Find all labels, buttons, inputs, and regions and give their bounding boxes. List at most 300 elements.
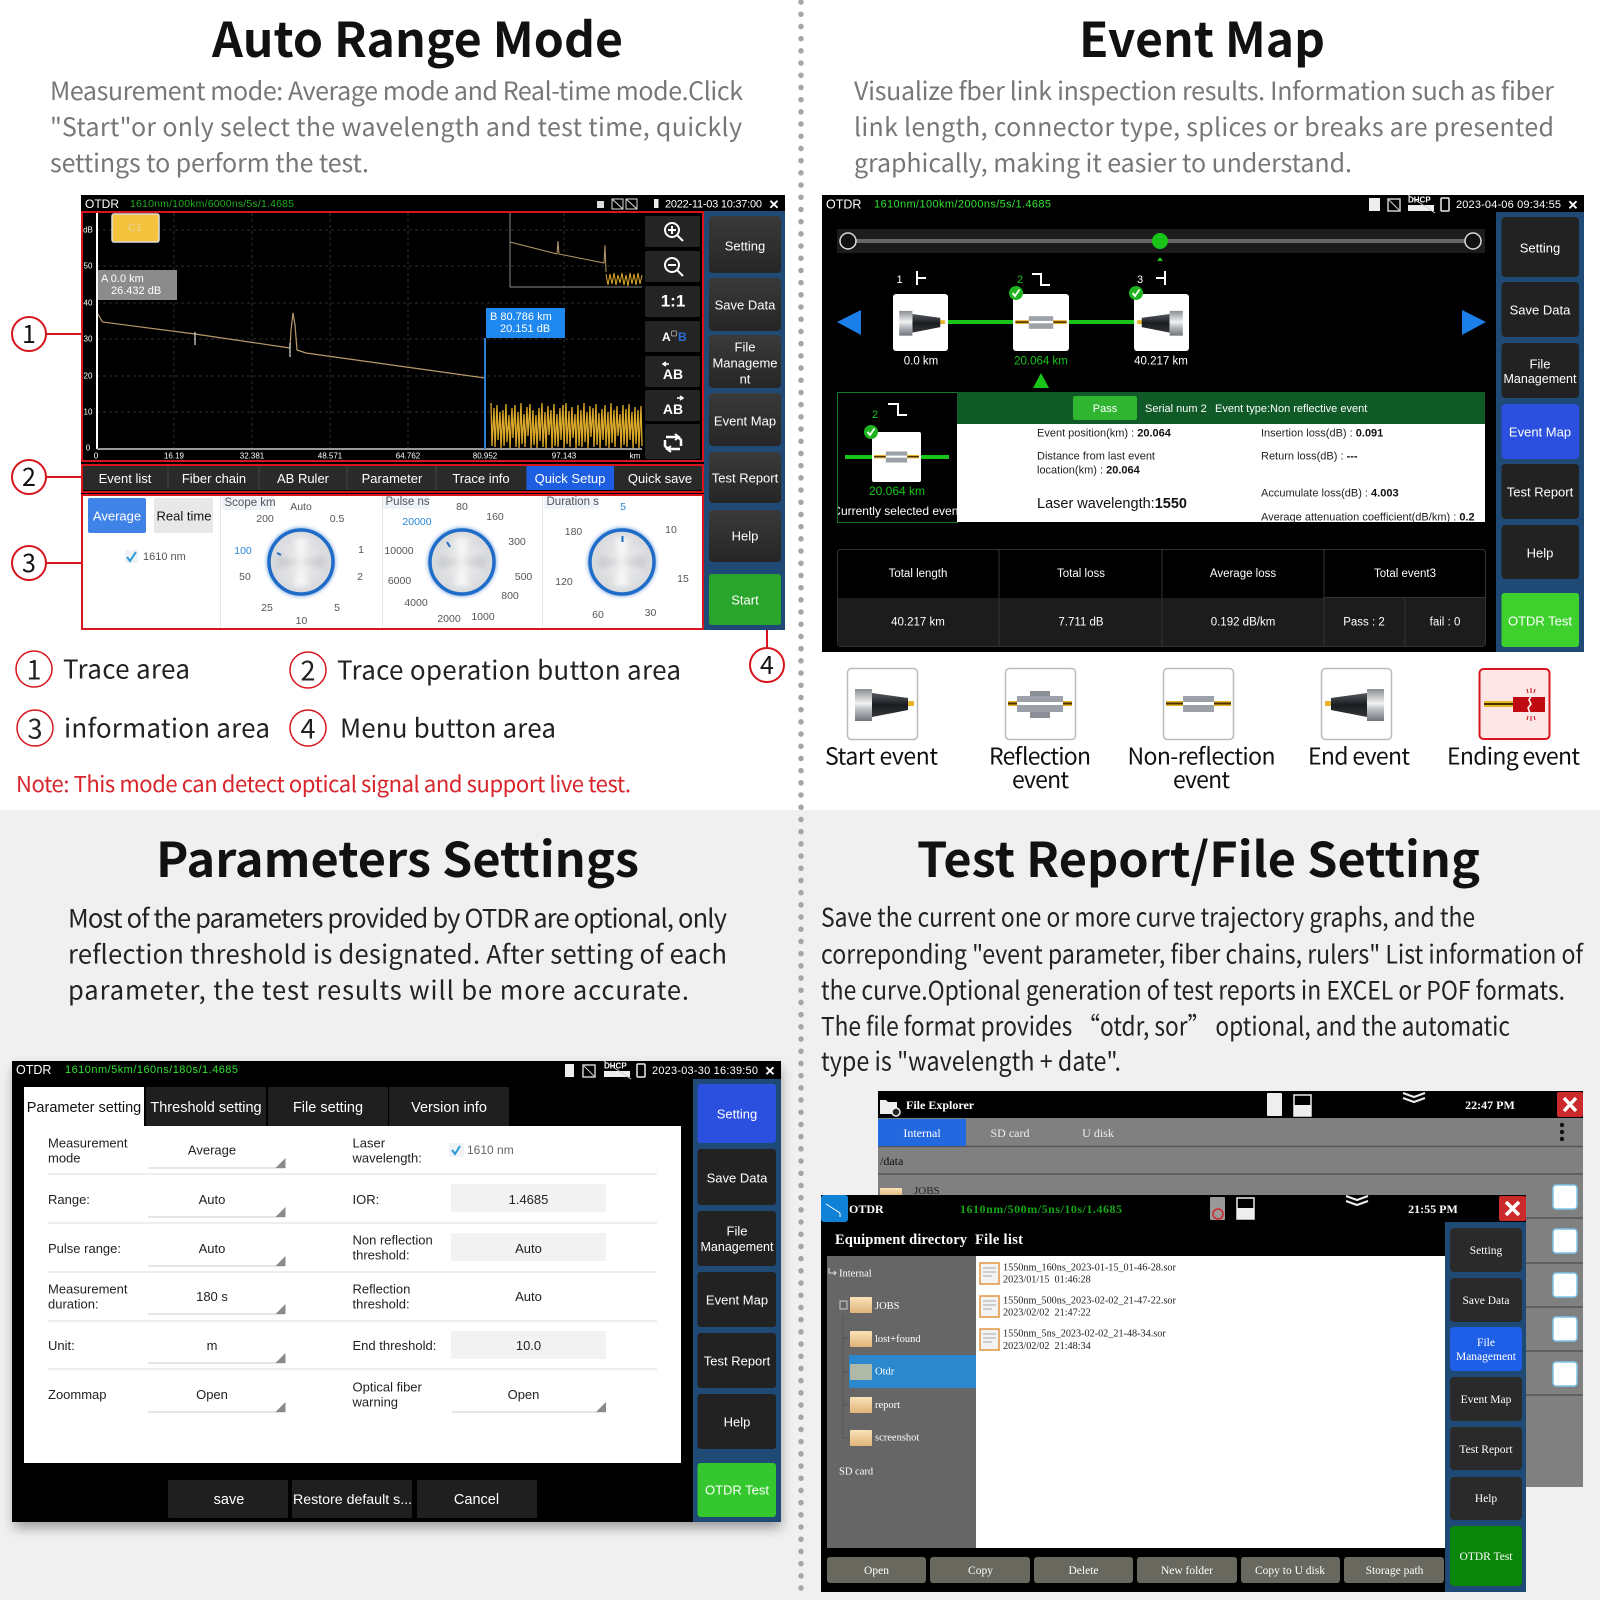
button: Save Data [1450,1278,1522,1322]
button: Event Map: Event Map [1461,1394,1512,1406]
button: File Management [1502,343,1579,398]
button: Help [1502,525,1579,579]
marker A label [98,270,177,300]
status bar: ✕ [765,1064,775,1078]
folder report [850,1397,900,1413]
left column labels [48,1136,128,1402]
trace area: km [630,452,641,460]
text: event map description: link length, connector type, splices or breaks are presented [854,108,1554,144]
storage tabs: Internal [903,1126,941,1140]
summary table: fail : 0 [1430,616,1460,628]
left column values: 180 s [196,1289,228,1304]
legend item 3: information area [64,708,270,746]
right column values: 10.0 [516,1338,541,1353]
button: Event Map active [1502,404,1579,459]
right column labels: Reflection [352,1282,410,1296]
legend item 2: 2 [300,650,316,688]
button: File Management: nt [740,372,751,386]
status bar: 1610nm/100km/2000ns/5s/1.4685 [874,198,1051,210]
pass badge: Pass [1093,403,1118,415]
button: C1 [112,214,159,242]
dial: Pulse ns: 20000 [402,516,432,528]
text: event map description: Visualize fber link inspection results. Information such as fiber [854,72,1554,108]
menu panel [693,1079,781,1522]
legend item 3: 3 [28,708,42,746]
right column labels: IOR: [352,1192,379,1207]
pass badge [1073,396,1137,420]
right column values: Auto [515,1289,542,1304]
menu panel [1496,212,1584,652]
button: Setting: Setting [1470,1245,1503,1257]
right column values: 1.4685 [509,1192,548,1207]
status bar: ✕ [1568,198,1578,212]
summary table: 7.711 dB [1058,616,1104,628]
file 2: 1550nm_500ns_2023-02-02_21-47-22.sor [1003,1296,1177,1306]
trace area: 16.19 [164,452,185,460]
left column values: Auto [199,1241,225,1256]
button: File Management: Management [701,1240,774,1254]
button: OTDR Test: OTDR Test [1460,1551,1513,1563]
dial: Pulse ns: 800 [501,590,519,602]
panel: parameters settings heading [68,821,727,1008]
marker B label [485,308,565,449]
text: parameters description: parameter, the test results will be more accurate. [68,970,689,1008]
status bar: OTDR [85,197,119,211]
button: Storage path: Storage path [1366,1565,1424,1577]
button: Event Map [1450,1377,1522,1421]
left column labels: mode [48,1150,81,1166]
text: event map description [854,72,1554,180]
folder screenshot: screenshot [875,1432,919,1444]
trace operation tabs: Fiber chain [182,471,246,486]
folder JOBS [840,1297,900,1313]
text: parameters description: reflection threshold is designated. After setting of each [68,934,727,972]
button: Test Report [698,1333,776,1388]
left column labels: Range: [48,1192,90,1207]
marker B label: 20.151 dB [500,323,550,335]
menu panel [1445,1222,1526,1592]
file 3: 1550nm_5ns_2023-02-02_21-48-34.sor [1003,1328,1166,1340]
dial: Scope km: 0.5 [330,513,344,525]
dial: Scope km: 25 [261,602,273,614]
header [821,1195,1526,1222]
right column labels [352,1136,436,1410]
summary table [838,550,1486,646]
right column values: Auto [515,1241,542,1256]
detail text: Average attenuation coefficient(dB/km) : 0.2 [1261,512,1475,524]
tabs [24,1087,509,1127]
dial: Scope km: Auto [290,501,312,513]
button: Test Report: Test Report [1459,1444,1513,1456]
button: save [168,1480,288,1518]
selected event detail [832,392,1485,524]
right column labels: warning [352,1394,398,1410]
button: File Management: Management [1504,372,1577,386]
button: save: save [214,1492,244,1508]
button: File Management [698,1211,776,1266]
button: File Management [709,335,781,388]
legend: area key [16,648,681,746]
status bar: 2023-04-06 09:34:55 [1456,199,1561,211]
status bar: 2023-03-30 16:39:50 [652,1065,758,1077]
panel: event map heading [854,1,1554,180]
left column values: Open [196,1387,228,1402]
screenshot: file explorer back window [878,1091,1583,1487]
right column labels: Optical fiber [352,1380,423,1394]
selected event thumbnail [832,404,962,518]
screenshot: parameter settings screen [12,1061,781,1528]
detail text: Distance from last event [1037,450,1155,462]
information area [81,494,704,630]
left column values: Average [188,1142,236,1158]
text: auto range description: "Start"or only select the wavelength and test time, quickly [50,108,742,144]
button: Storage path [1344,1557,1444,1583]
trace area: 30 [84,334,93,344]
button: Setting active [698,1084,776,1143]
title: Test Report/File Setting: Test Report/File Setting [917,821,1480,891]
panel: test report heading [821,821,1585,1078]
button: Real time [154,498,213,533]
right column labels: Non reflection [352,1232,433,1248]
callout marker 1 [12,315,81,351]
button: Open [827,1557,926,1583]
button: Start: Start [731,592,759,608]
headings: equipment directory and file list: File list [975,1232,1023,1248]
callout marker 3 [12,544,81,580]
right column labels: Laser [352,1136,386,1150]
status bar: OTDR [826,198,861,212]
trace operation tabs [83,466,703,490]
inset overview [510,213,642,287]
header: 1610nm/500m/5ns/10s/1.4685 [960,1202,1122,1216]
button: Save Data [709,278,781,331]
trace area: 50 [84,262,93,270]
file 1: 2023/01/15 01:46:28 [1003,1274,1091,1286]
file 3 [980,1328,1166,1352]
folder lost+found [850,1331,921,1347]
summary table: Total length [889,568,947,580]
dial: Duration s: 10 [665,524,677,536]
screenshot: file management front window [821,1195,1526,1592]
button: C1: C1 [128,222,142,234]
dial: Duration s [544,495,689,621]
summary table: 0.192 dB/km [1211,616,1275,628]
selected event detail: Serial num 2 [1145,403,1207,415]
legend item 1 [16,648,190,688]
button: Save Data: Save Data [707,1170,768,1186]
trace area: 40 [84,298,93,308]
event type legend [825,668,1580,795]
status bar: DHCP [1408,196,1431,204]
button: Help [698,1394,776,1449]
trace operation tabs: Trace info [452,471,510,486]
dial: Scope km: 2 [357,571,363,583]
event 3 end: 40.217 km [1134,356,1188,368]
button: Delete [1034,1557,1133,1583]
left column labels: duration: [48,1296,99,1312]
tabs: Version info [411,1100,487,1116]
icon: non-reflection event [1164,668,1234,740]
dial: Pulse ns: 500 [515,571,532,583]
screenshot: OTDR auto range screen [81,195,785,630]
callout marker 2: 2 [22,458,36,494]
summary table: 40.217 km [891,616,945,628]
legend item 4: 4 [300,708,316,746]
button: OTDR Test [1502,593,1579,647]
file 1 [980,1262,1177,1286]
dial: Duration s: 180 [565,526,582,538]
dial: Duration s: 30 [645,607,656,619]
zoom and ruler tool buttons: A [662,330,671,344]
right column labels: threshold: [352,1248,410,1262]
button: OTDR Test: OTDR Test [1508,614,1572,628]
zoom and ruler tool buttons [645,216,700,459]
zoom and ruler tool buttons: AB [663,401,683,417]
dial: Scope km: 10 [296,615,307,627]
tabs: File setting [293,1100,363,1116]
summary table: Total event3 [1374,568,1436,580]
left column labels: Zoommap [48,1387,107,1402]
status bar: 1610nm/5km/160ns/180s/1.4685 [65,1064,238,1076]
directory tree: SD card [839,1466,874,1478]
storage tabs: U disk [1082,1126,1114,1140]
checkbox 1610 nm: 1610 nm [143,551,186,563]
button: Test Report: Test Report [712,470,779,486]
dial: Pulse ns: 1000 [471,611,495,623]
trace operation tabs: AB Ruler [277,471,330,486]
text: parameters description: Most of the parameters provided by OTDR are optional, only [68,898,727,936]
trace area: 10 [84,408,93,416]
label: Non-reflection event: event [1173,761,1230,795]
button: New folder: New folder [1161,1565,1213,1577]
dial: Pulse ns: 300 [508,536,526,548]
right column values [449,1143,548,1402]
dial: Pulse ns: Pulse ns [386,496,430,508]
button: Save Data [1502,282,1579,337]
button: OTDR Test: OTDR Test [705,1482,769,1498]
left column labels: Unit: [48,1338,75,1353]
left column values [188,1142,236,1402]
header: 22:47 PM [1465,1098,1515,1112]
dial: Duration s: 120 [555,576,573,588]
dial: Pulse ns: 4000 [404,597,428,609]
label: Reflection event: event [1012,761,1069,795]
text: event map description: graphically, making it easier to understand. [854,144,1352,180]
dial: Scope km: Scope km [224,497,276,509]
button: Setting: Setting [725,238,765,254]
header: OTDR [849,1202,884,1216]
arrow: previous [837,310,861,335]
detail text: Insertion loss(dB) : 0.091 [1261,428,1383,440]
marker A label: 26.432 dB [111,285,161,297]
selection pointer [1033,373,1049,388]
menu panel [704,211,785,630]
JOBS row: JOBS [914,1185,940,1197]
button: Save Data: Save Data [1510,302,1571,318]
label: End event: End event [1308,738,1410,772]
slider [837,229,1485,261]
event chain [893,271,1189,368]
event 1 start [893,271,948,368]
icon: start event [848,668,918,740]
file 2 [980,1296,1177,1318]
directory tree [827,1256,976,1548]
button: Open: Open [864,1565,889,1577]
text: test report description: Save the current one or more curve trajectory graphs, and the [821,898,1475,934]
screenshot: OTDR event map screen [822,195,1584,652]
panel: auto range mode [50,1,743,180]
icon: reflection event [1006,668,1076,740]
status bar: 2022-11-03 10:37:00 [665,198,762,210]
button: Save Data: Save Data [715,298,776,312]
left column values: m [207,1338,217,1353]
trace operation tabs: Quick save [628,471,692,486]
trace area [83,213,700,460]
button: Cancel [417,1480,537,1518]
folder Otdr: Otdr [875,1366,895,1378]
legend item 4: Menu button area [340,708,556,746]
left column labels: Measurement [48,1282,128,1296]
callout marker 1: 1 [22,315,36,351]
button: Help [1450,1477,1522,1520]
button: File Management active [1450,1327,1522,1371]
legend item 1: 1 [26,648,42,688]
settings form [24,1126,681,1463]
callout marker 4: 4 [760,646,774,682]
button: File Management: File [727,1224,747,1238]
button: Restore default: Restore default s... [293,1492,412,1508]
trace operation tabs: Quick Setup [535,471,605,486]
summary table: Average loss [1210,568,1276,580]
zoom and ruler tool buttons: 1:1 [661,292,685,310]
storage tabs: SD card [990,1126,1030,1140]
detail text: Accumulate loss(dB) : 4.003 [1261,488,1399,500]
noise [491,403,642,448]
page background: grey lower half [0,810,1600,1600]
button: Help: Help [1475,1493,1497,1505]
button: Setting active: Setting [717,1106,757,1122]
trace area: 0 [86,444,91,452]
button: Setting [709,216,781,273]
summary table: Pass : 2 [1343,616,1385,628]
button: Setting [1450,1228,1522,1272]
button: Help: Help [732,528,758,544]
legend item 2: Trace operation button area [337,650,681,688]
button: Event Map: Event Map [706,1292,768,1308]
button: Start [709,574,781,625]
dial: Duration s: Duration s [546,496,599,508]
icon: end event [1322,668,1392,740]
dial: Pulse ns [383,495,532,625]
icon: ending event [1480,669,1550,739]
status bar: 1610nm/100km/6000ns/5s/1.4685 [130,198,294,210]
button: Copy [930,1557,1030,1583]
label: Start event: Start event [825,738,938,772]
title: Auto Range Mode: Auto Range Mode [211,1,623,71]
dial: Pulse ns: 80 [456,501,468,513]
callout marker 2 [12,458,81,494]
trace operation tabs: Event list [99,471,152,486]
label: Ending event: Ending event [1447,738,1580,772]
marker B label: B 80.786 km [490,311,552,323]
button: Test Report: Test Report [704,1354,771,1368]
status bar: DHCP [604,1062,627,1070]
trace area: 32.381 [240,452,265,460]
button: File Management: File [1530,356,1550,372]
trace area: 20 [84,372,93,380]
status bar [85,197,779,212]
button: Event Map [698,1272,776,1327]
file 1: 1550nm_160ns_2023-01-15_01-46-28.sor [1003,1262,1177,1274]
left column values: Auto [199,1192,225,1207]
button: File Management: Manageme [712,356,778,370]
tabs: Parameter setting [27,1100,141,1116]
button: Event Map active: Event Map [1509,424,1571,440]
text: test report description: type is "wavelength + date". [821,1042,1121,1078]
label: Non-reflection event [1128,738,1276,795]
callout marker 3: 3 [22,544,36,580]
tabs: Threshold setting [150,1100,262,1116]
page background: white upper half [0,0,1600,810]
button: Test Report: Test Report [1507,484,1574,500]
text: auto range description [50,72,743,180]
trace area: 97.143 [552,452,577,460]
storage tabs [878,1119,1564,1146]
right column values: Open [508,1387,539,1402]
dial: Pulse ns: 10000 [384,545,414,557]
event 2 non-reflection: 20.064 km [1014,356,1068,368]
zoom and ruler tool buttons: B [678,330,687,344]
status bar: ✕ [769,197,779,212]
event 2 non-reflection [1009,274,1069,368]
dial: Scope km [222,496,364,627]
trace area: dB [83,226,93,234]
selected event detail: Event type:Non reflective event [1215,403,1367,415]
checkbox 1610 nm [125,550,186,563]
button: Real time: Real time [157,508,211,524]
legend item 1: Trace area [63,650,190,686]
dial: Scope km: 50 [239,571,251,583]
button: Setting: Setting [1520,240,1560,256]
text: parameters description [68,898,727,1008]
dial: Duration s: 60 [592,609,604,621]
text: test report description [821,898,1585,1078]
left column labels: Measurement [48,1136,128,1150]
event 3 end [1129,271,1189,368]
trace operation tabs: Parameter [362,471,423,486]
label: Non-reflection event: Non-reflection [1128,738,1276,772]
button: Copy to U disk [1241,1557,1340,1583]
right column labels: wavelength: [352,1150,422,1166]
dial: Pulse ns: 160 [486,511,504,523]
folder lost+found: lost+found [875,1334,921,1345]
event 1 start: 0.0 km [904,356,938,368]
right column values: 1610 nm [467,1143,514,1157]
button: Average [88,498,146,533]
button: Help: Help [724,1414,750,1430]
event 3 end: 3 [1137,274,1143,286]
button: File Management active: File [1477,1337,1495,1349]
detail text: Event position(km) : 20.064 [1037,428,1172,440]
button: Help [709,510,781,562]
folder JOBS: JOBS [875,1301,900,1312]
folder screenshot [850,1430,919,1446]
text: test report description: The file format provides “otdr, sor” optional, and the automatic [821,1006,1510,1044]
dial: Pulse ns: 2000 [437,613,461,625]
header: File Explorer [906,1098,975,1112]
folder report: report [875,1400,900,1411]
button: OTDR Test [1450,1526,1522,1586]
